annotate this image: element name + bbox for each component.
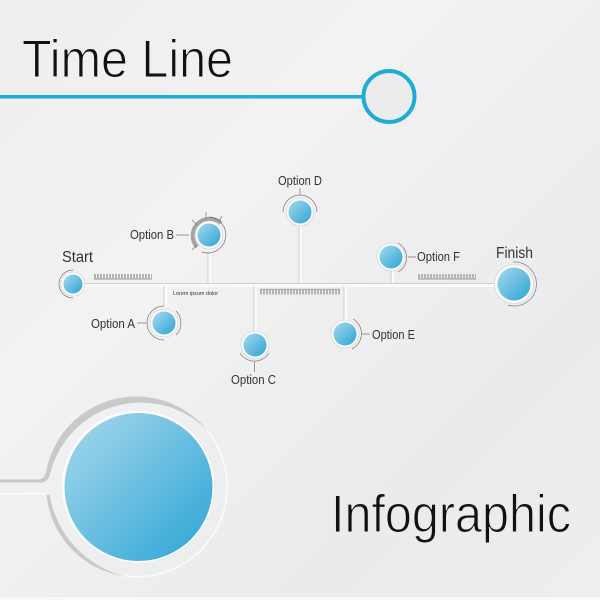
node: Option B	[130, 212, 226, 253]
ruler: start	[94, 276, 152, 279]
node: Option C	[231, 331, 276, 387]
node: Option D	[278, 174, 322, 226]
large blue circle with ring	[0, 396, 227, 577]
ruler: middle	[260, 290, 340, 292]
node: Option D: Option D	[278, 174, 322, 188]
node: Start: Start	[62, 249, 94, 266]
title: Time Line: Time Line	[22, 30, 233, 89]
node: Finish	[494, 245, 536, 306]
node: Option E: Option E	[372, 328, 415, 342]
ruler: right	[418, 276, 476, 279]
node: Finish: Finish	[496, 245, 533, 262]
node: Option F	[377, 243, 460, 272]
node: Option B: Option B	[130, 228, 174, 242]
node: Option A: Option A	[91, 317, 136, 331]
caption: Lorem ipsum dolor: Lorem ipsum dolor	[173, 291, 218, 297]
header line with circle	[0, 71, 414, 122]
node: Start	[59, 249, 94, 298]
title: Infographic: Infographic	[331, 485, 571, 544]
node: Option A	[91, 306, 181, 340]
timeline connectors	[84, 226, 497, 332]
node: Option E	[331, 319, 415, 349]
node: Option C: Option C	[231, 373, 276, 387]
node: Option F: Option F	[417, 250, 460, 264]
